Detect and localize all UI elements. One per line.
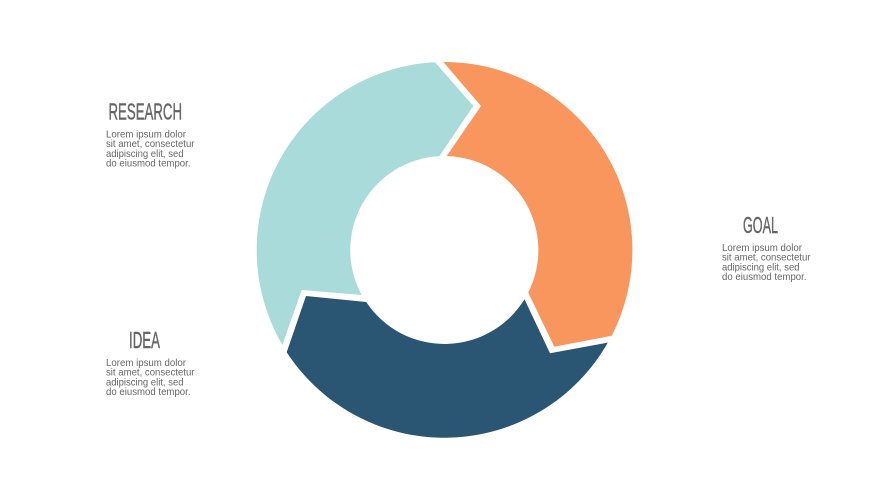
body text: idea: adipiscing elit, sed <box>106 377 184 388</box>
heading: goal: GOAL <box>743 212 778 238</box>
body text: goal <box>722 243 811 283</box>
body text: idea: sit amet, consectetur <box>106 368 195 379</box>
body text: research: Lorem ipsum dolor <box>106 130 187 140</box>
segment: goal (orange arrow) <box>443 62 632 347</box>
body text: goal: do eiusmod tempor. <box>722 272 806 283</box>
donut cycle chart <box>257 62 632 438</box>
body text: research <box>106 130 195 170</box>
body text: research: adipiscing elit, sed <box>106 149 184 160</box>
text block: research <box>106 98 195 170</box>
segment: research (teal arrow) <box>257 62 473 345</box>
body text: idea <box>106 358 195 398</box>
body text: research: do eiusmod tempor. <box>106 159 190 170</box>
body text: research: sit amet, consectetur <box>106 139 195 150</box>
heading: idea: IDEA <box>129 327 160 353</box>
text block: idea <box>106 327 195 398</box>
heading: research: RESEARCH <box>108 98 182 124</box>
body text: idea: Lorem ipsum dolor <box>106 358 187 369</box>
text block: goal <box>722 212 811 283</box>
body text: goal: adipiscing elit, sed <box>722 262 800 273</box>
body text: idea: do eiusmod tempor. <box>106 387 190 398</box>
body text: goal: Lorem ipsum dolor <box>722 243 803 254</box>
segment: idea (navy arrow) <box>287 296 608 438</box>
body text: goal: sit amet, consectetur <box>722 253 811 264</box>
